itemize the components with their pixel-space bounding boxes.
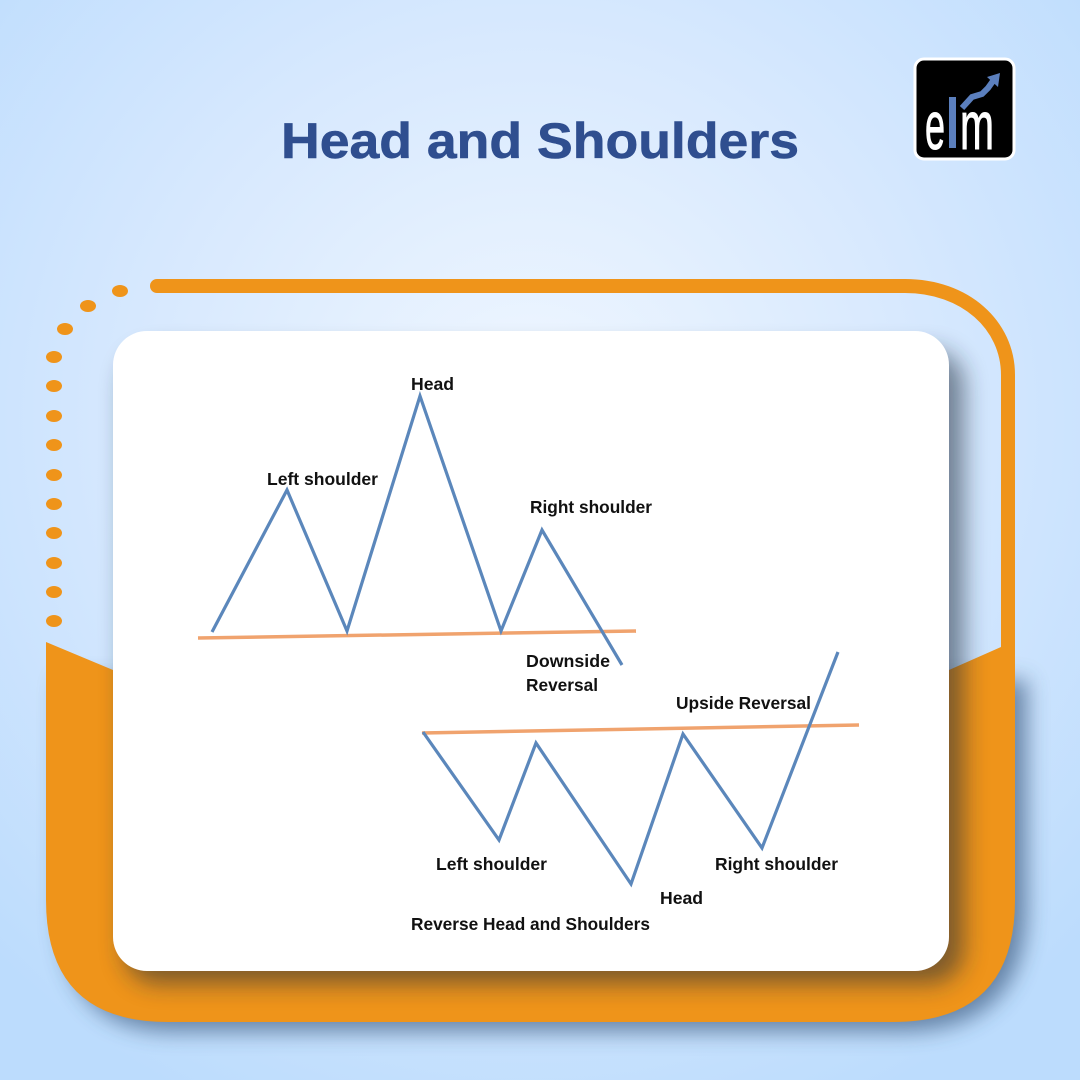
chart: head and shoulders <box>198 374 652 695</box>
label: right shoulder: Right shoulder <box>715 854 838 874</box>
label: right shoulder: Right shoulder <box>530 497 652 517</box>
logo: elm <box>915 59 1014 164</box>
white card shadow <box>124 350 964 984</box>
label: head: Head <box>411 374 454 394</box>
orange frame shadow <box>60 680 1027 1032</box>
price line top <box>212 396 622 665</box>
label: left shoulder: Left shoulder <box>436 854 547 874</box>
price line bottom <box>423 652 838 884</box>
label: upside reversal: Upside Reversal <box>676 693 811 713</box>
label: left shoulder: Left shoulder <box>267 469 378 489</box>
neckline bottom <box>422 725 859 733</box>
dotted arc <box>46 285 128 627</box>
logo letters: e <box>925 88 945 164</box>
label: head: Head <box>660 888 703 908</box>
orange frame base <box>46 642 1015 1022</box>
chart: reverse head and shoulders <box>411 652 859 934</box>
white card <box>113 331 949 971</box>
orange frame top line <box>157 286 1008 655</box>
label: downside reversal: Downside <box>526 651 610 671</box>
label: reverse head and shoulders: Reverse Head and Shoulders <box>411 914 650 934</box>
label: downside reversal: Reversal <box>526 675 598 695</box>
title: Head and Shoulders <box>281 113 799 169</box>
neckline top <box>198 631 636 638</box>
logo: elm: m <box>960 88 994 164</box>
